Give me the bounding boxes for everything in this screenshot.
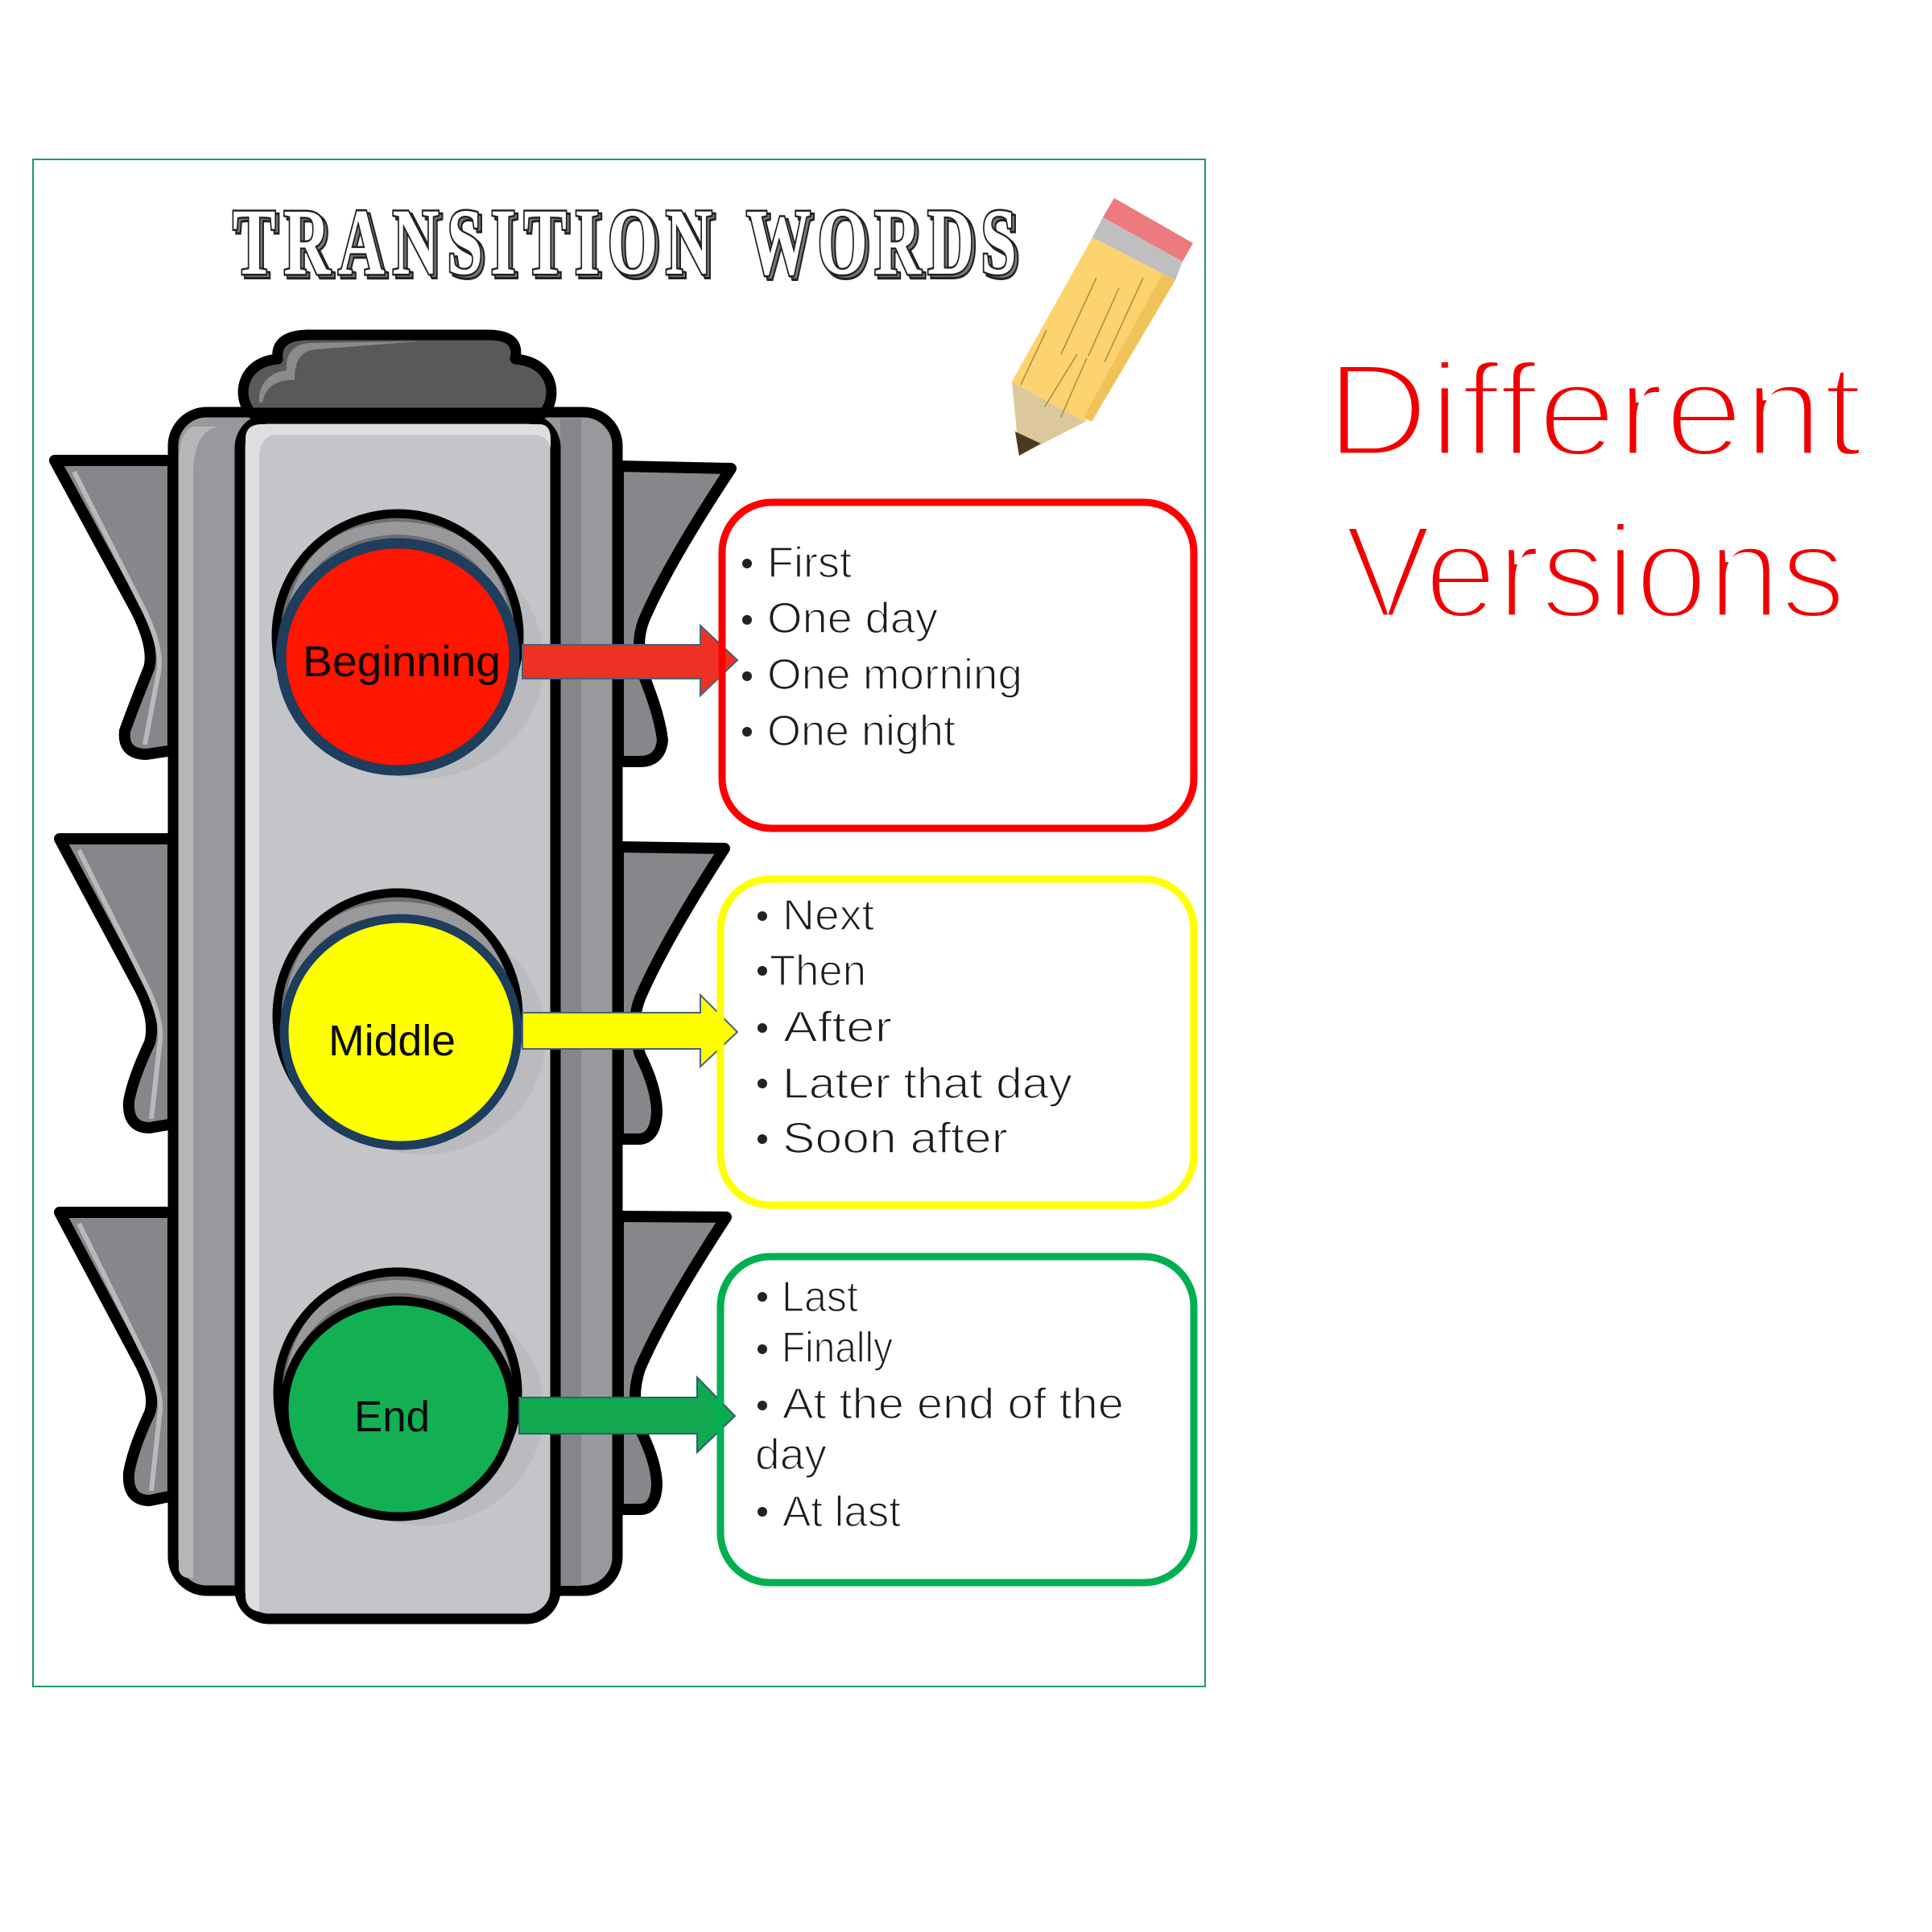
label: Middle: Middle: [328, 1017, 456, 1065]
bullet list: [742, 539, 1022, 755]
bullet list: After: [783, 1003, 892, 1051]
bullet list: At last: [782, 1488, 901, 1536]
title: WORDS: [746, 189, 1017, 295]
right visors: [618, 466, 731, 1509]
panel: end words: [720, 1257, 1194, 1583]
cap: [243, 335, 551, 413]
label: Beginning: Beginning: [303, 638, 501, 686]
green light: [278, 1272, 544, 1525]
bullet list: [758, 891, 1072, 1162]
yellow light: [277, 893, 546, 1154]
bullet list: Then: [770, 947, 866, 995]
left visors: [55, 460, 173, 1501]
bullet list: At the end of the: [782, 1380, 1124, 1428]
bullet list: One night: [767, 707, 956, 755]
bullet list: First: [767, 539, 852, 587]
bullet list: [755, 1273, 1124, 1536]
title: [233, 189, 1020, 298]
bullet list: Finally: [782, 1323, 893, 1372]
icon: pencil: [1012, 198, 1193, 456]
label: End: End: [354, 1393, 430, 1441]
title: WORDS: [749, 192, 1020, 298]
bullet list: One morning: [767, 650, 1022, 699]
title: TRANSITION: [233, 189, 712, 295]
arrow: yellow: [522, 995, 737, 1067]
arrow: red: [522, 625, 737, 696]
bullet list: Last: [782, 1273, 858, 1321]
traffic light: [55, 335, 731, 1619]
arrow: green: [519, 1377, 735, 1452]
poster panel: [33, 159, 1205, 1686]
side heading: Different Versions: [1326, 336, 1863, 646]
side heading: Different Versions: Versions: [1344, 497, 1846, 646]
side heading: Different Versions: Different: [1326, 336, 1863, 484]
panel: beginning words: [722, 502, 1194, 828]
panel: middle words: [720, 879, 1194, 1205]
bullet list: One day: [767, 594, 938, 642]
red light: [276, 514, 544, 778]
bullet list: Later that day: [782, 1059, 1072, 1108]
back housing: [173, 412, 617, 1591]
bullet list: Soon after: [782, 1114, 1008, 1162]
title: TRANSITION: [236, 192, 716, 298]
front housing: [240, 419, 555, 1619]
bullet list: Next: [782, 891, 874, 939]
bullet list: day: [755, 1430, 827, 1479]
